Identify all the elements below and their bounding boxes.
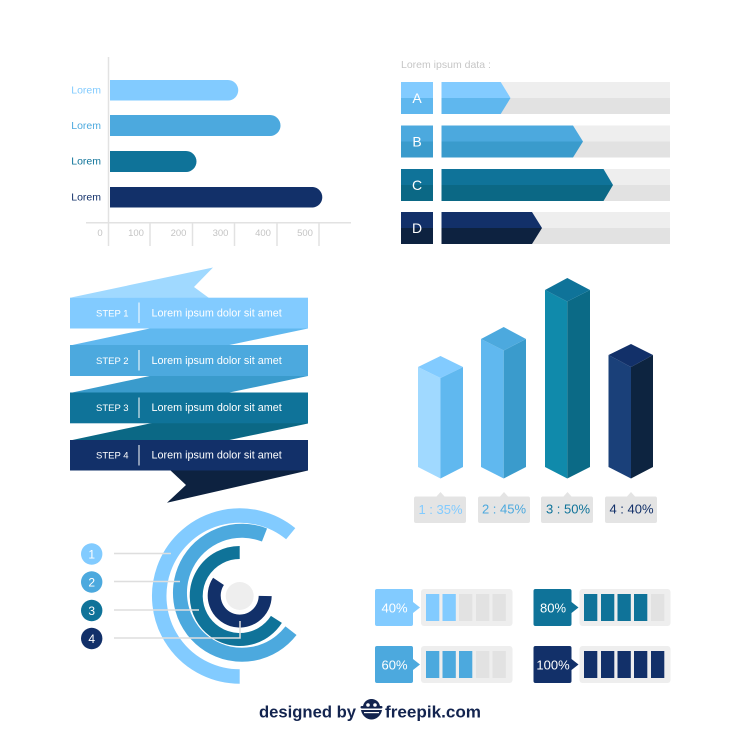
step 2 — [70, 345, 308, 376]
bar labels — [71, 85, 101, 204]
ribbon fold 1 — [70, 328, 308, 346]
panel: ribbon steps — [70, 268, 308, 503]
legend 3: 3 — [88, 604, 95, 618]
tag 80%: 80% — [540, 600, 566, 616]
legend 4 — [81, 628, 102, 649]
column 2 — [481, 327, 526, 478]
bar labels: Lorem — [71, 192, 101, 204]
value label 4 — [605, 492, 657, 523]
step 4: STEP 4 — [96, 450, 129, 462]
step 3: STEP 3 — [96, 403, 129, 414]
footer: designed by freepik.com: designed by — [259, 702, 357, 722]
axis labels — [97, 228, 313, 239]
value label 1: 1 : 35% — [418, 502, 463, 517]
step 2: STEP 2 — [96, 356, 129, 367]
value label 3 — [541, 492, 593, 523]
step 4: Lorem ipsum dolor sit amet — [152, 450, 282, 462]
column 4 — [608, 344, 653, 478]
footer: designed by freepik.com — [259, 699, 481, 722]
column 1 — [418, 356, 463, 478]
bar labels: Lorem — [71, 120, 101, 132]
panel: concentric ring chart — [81, 515, 291, 676]
tag 100% — [534, 646, 670, 683]
step 3 — [70, 392, 308, 423]
ring center — [226, 582, 254, 610]
legend 1 — [81, 543, 102, 565]
panel: lettered progress arrows — [401, 59, 670, 244]
step 4 — [70, 440, 308, 470]
axis labels: 300 — [213, 228, 228, 239]
ribbon fold 3 — [70, 423, 308, 440]
panel: progress tags — [375, 589, 670, 683]
step 2: Lorem ipsum dolor sit amet — [152, 355, 282, 367]
bar labels: Lorem — [71, 85, 101, 97]
step 1: STEP 1 — [96, 308, 129, 320]
column 3 — [545, 278, 590, 478]
row B — [401, 126, 670, 158]
heading: Lorem ipsum data : — [401, 59, 491, 71]
ribbon top flag — [70, 268, 213, 298]
value label 4: 4 : 40% — [609, 502, 654, 516]
step 1 — [70, 298, 308, 328]
ring 4 — [214, 581, 265, 621]
row D: D — [412, 220, 422, 236]
tag 80% — [534, 589, 670, 626]
row D — [401, 212, 670, 244]
step 1: Lorem ipsum dolor sit amet — [152, 308, 282, 320]
tag 60% — [375, 646, 512, 683]
step 3: Lorem ipsum dolor sit amet — [152, 402, 282, 414]
legend 3 — [81, 600, 102, 621]
row A — [401, 82, 670, 114]
tag 60%: 60% — [381, 658, 408, 672]
value label 1 — [414, 492, 466, 523]
bar: Lorem 1 — [110, 80, 238, 100]
bar: Lorem 4 — [110, 187, 322, 208]
panel: 3D column chart — [414, 278, 657, 523]
bar: Lorem 3 — [110, 151, 197, 172]
axis labels: 100 — [128, 228, 144, 239]
panel: horizontal bar chart — [71, 57, 351, 246]
legend 2: 2 — [88, 576, 95, 590]
axis labels: 0 — [97, 228, 103, 239]
row A: A — [412, 90, 422, 106]
ribbon fold 2 — [70, 376, 308, 393]
legend 2 — [81, 571, 102, 593]
axis labels: 200 — [171, 228, 186, 239]
legend 4: 4 — [88, 632, 95, 646]
ring 2 — [180, 531, 291, 655]
row B: B — [412, 134, 422, 150]
bar: Lorem 2 — [110, 115, 280, 136]
bar labels: Lorem — [71, 156, 101, 168]
legend 1: 1 — [88, 548, 95, 562]
value label 2 — [478, 492, 530, 523]
axis labels: 400 — [255, 228, 271, 239]
leader lines — [114, 554, 240, 638]
row C — [401, 169, 670, 201]
axis labels: 500 — [297, 228, 313, 239]
value label 2: 2 : 45% — [482, 502, 526, 516]
value label 3: 3 : 50% — [546, 502, 590, 516]
tag 40% — [375, 589, 512, 626]
ring 1 — [159, 515, 291, 676]
tag 100%: 100% — [536, 658, 570, 672]
ribbon tail — [167, 470, 308, 503]
tag 40%: 40% — [381, 600, 408, 616]
footer: designed by freepik.com: freepik.com — [385, 702, 481, 722]
ring 3 — [196, 552, 276, 640]
row C: C — [412, 177, 422, 193]
icon: freepik mascot — [360, 699, 382, 720]
